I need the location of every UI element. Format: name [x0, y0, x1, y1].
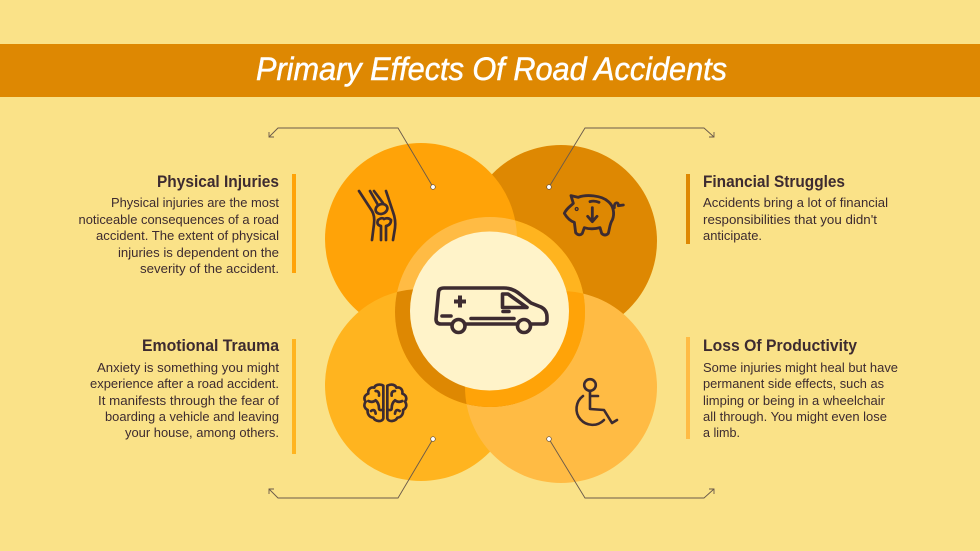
heading: Financial Struggles: [703, 172, 845, 191]
connector: loss of productivity: [547, 437, 714, 498]
accent bar: [686, 337, 690, 439]
heading: Emotional Trauma: [142, 336, 279, 355]
icon: knee joint: [359, 191, 395, 240]
connector: financial struggles: [547, 128, 714, 189]
body text: [703, 195, 888, 243]
overlapping circle diagram: [325, 143, 657, 483]
icon: piggy bank: [564, 196, 623, 235]
body text: [90, 360, 279, 440]
body text: [78, 195, 279, 276]
body text: a limb.: [703, 425, 740, 440]
body text: Accidents bring a lot of financial: [703, 195, 888, 210]
body text: all through. You might even lose: [703, 409, 887, 424]
body text: severity of the accident.: [140, 261, 279, 276]
icon: brain: [364, 385, 406, 421]
panel: emotional trauma: [90, 336, 296, 454]
heading: Physical Injuries: [157, 172, 279, 191]
circle: physical injuries: [325, 143, 517, 335]
icon: ambulance: [436, 288, 547, 332]
body text: [703, 360, 898, 440]
title: Primary Effects Of Road Accidents: [256, 51, 727, 87]
body text: injuries is dependent on the: [118, 245, 279, 260]
heading: Loss Of Productivity: [703, 336, 858, 355]
body text: Physical injuries are the most: [111, 195, 279, 210]
connector: emotional trauma: [269, 437, 435, 498]
body text: anticipate.: [703, 228, 762, 243]
accent bar: [292, 174, 296, 273]
body text: experience after a road accident.: [90, 376, 279, 391]
body text: responsibilities that you didn't: [703, 212, 877, 227]
accent bar: [686, 174, 690, 244]
connector: physical injuries: [269, 128, 435, 189]
circle: financial struggles: [465, 145, 657, 337]
center disc: [410, 232, 569, 390]
body text: accident. The extent of physical: [96, 228, 279, 243]
body text: permanent side effects, such as: [703, 376, 884, 391]
panel: physical injuries: [78, 172, 296, 276]
center ring: [395, 217, 585, 407]
body text: It manifests through the fear of: [98, 393, 279, 408]
body text: Some injuries might heal but have: [703, 360, 898, 375]
body text: your house, among others.: [125, 425, 279, 440]
body text: noticeable consequences of a road: [78, 212, 279, 227]
title banner: [0, 44, 980, 97]
panel: financial struggles: [686, 172, 888, 244]
accent bar: [292, 339, 296, 454]
panel: loss of productivity: [686, 336, 898, 440]
circle: emotional trauma: [325, 289, 517, 481]
icon: wheelchair: [577, 379, 617, 425]
circle: loss of productivity: [465, 291, 657, 483]
body text: boarding a vehicle and leaving: [105, 409, 279, 424]
body text: limping or being in a wheelchair: [703, 393, 886, 408]
body text: Anxiety is something you might: [97, 360, 279, 375]
